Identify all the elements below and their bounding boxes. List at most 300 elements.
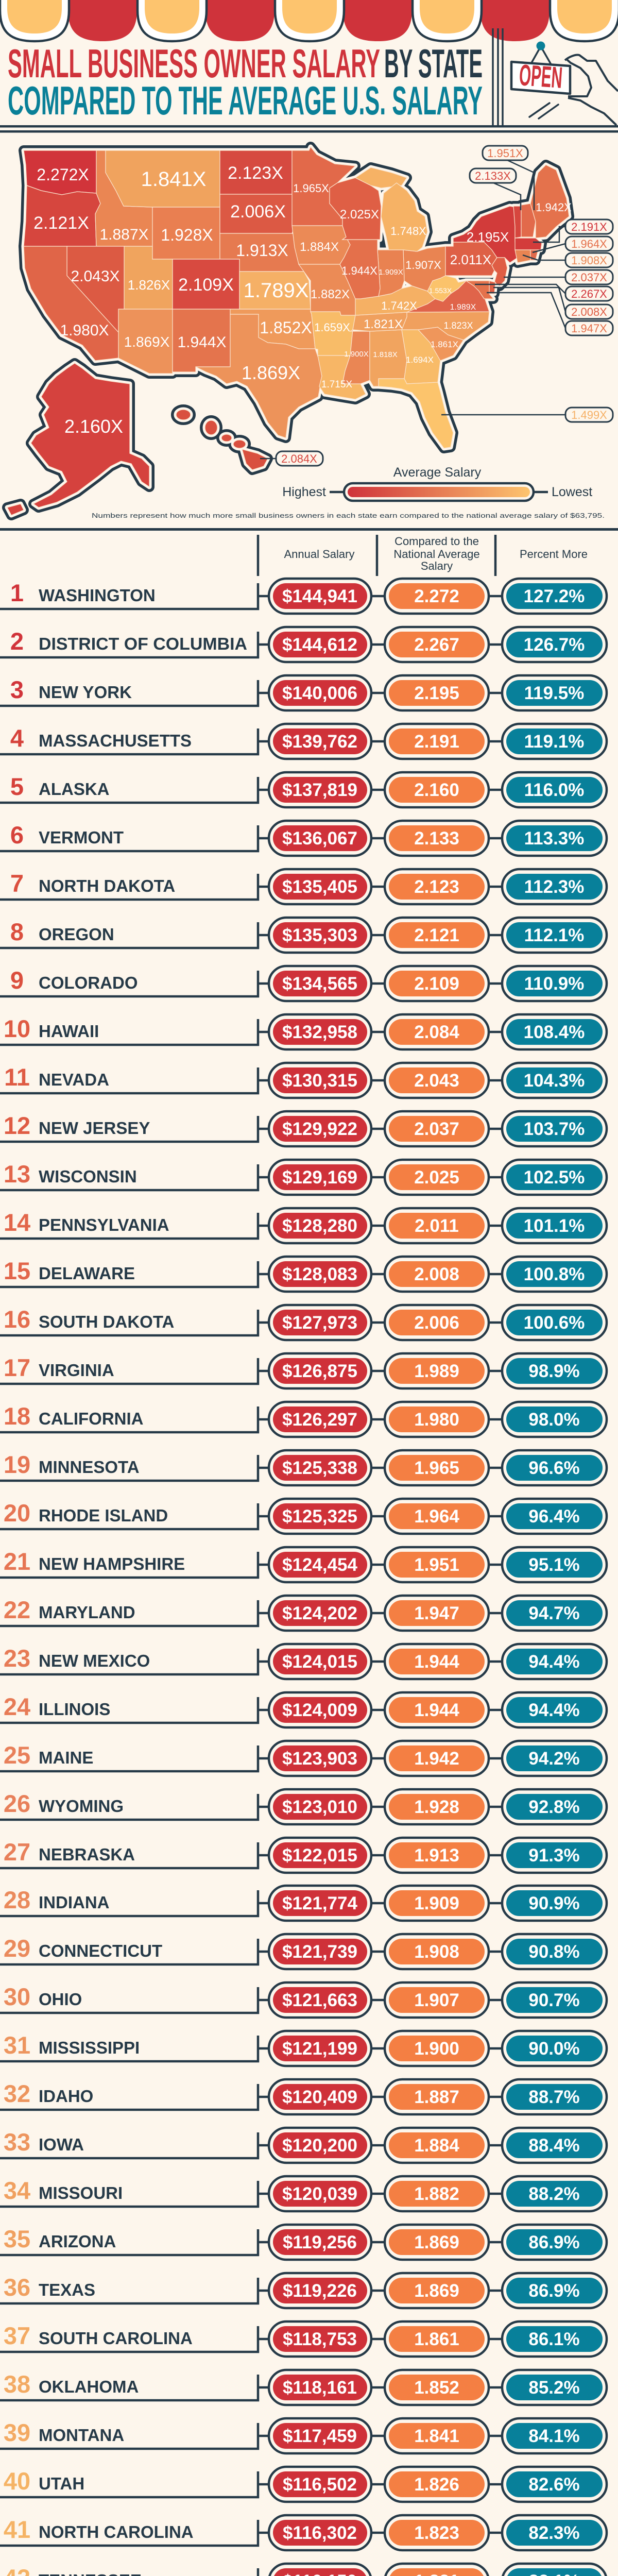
row 39: 39 bbox=[4, 2419, 30, 2446]
row 11: 11 bbox=[4, 1063, 30, 1091]
row 14 bbox=[0, 1208, 607, 1243]
map state labels: 1.789X bbox=[244, 279, 308, 302]
row 7: $135,405 bbox=[282, 877, 357, 897]
row 18: 98.0% bbox=[528, 1410, 580, 1430]
table header: Annual Salary bbox=[284, 548, 354, 561]
row 39: MONTANA bbox=[39, 2426, 124, 2445]
row 15: 2.008 bbox=[414, 1264, 459, 1284]
row 26: 1.928 bbox=[414, 1797, 459, 1817]
row 25: $123,903 bbox=[282, 1749, 357, 1769]
row 20: $125,325 bbox=[282, 1506, 357, 1527]
row 21: 21 bbox=[4, 1548, 30, 1575]
icon: open sign with hand: OPEN bbox=[518, 58, 563, 95]
row 3: 119.5% bbox=[524, 683, 584, 703]
row 27: NEBRASKA bbox=[39, 1845, 135, 1864]
map callouts: 2.133X bbox=[475, 170, 511, 182]
row 27: $122,015 bbox=[282, 1845, 357, 1866]
map bbox=[7, 146, 613, 515]
row 25 bbox=[0, 1741, 607, 1776]
row 7 bbox=[0, 869, 607, 904]
row 12: $129,922 bbox=[282, 1119, 357, 1139]
row 28: 90.9% bbox=[528, 1893, 580, 1913]
row 3: 3 bbox=[10, 676, 24, 703]
row 37: 86.1% bbox=[528, 2329, 580, 2349]
row 37: SOUTH CAROLINA bbox=[39, 2329, 193, 2348]
row 38: $118,161 bbox=[283, 2378, 357, 2398]
row 18: CALIFORNIA bbox=[39, 1409, 143, 1428]
row 3: $140,006 bbox=[282, 683, 357, 703]
row 1: $144,941 bbox=[282, 586, 357, 606]
row 10: HAWAII bbox=[39, 1022, 99, 1041]
row 36: 86.9% bbox=[528, 2281, 580, 2301]
row 13: 2.025 bbox=[414, 1167, 459, 1188]
row 13: $129,169 bbox=[282, 1167, 357, 1188]
row 5: ALASKA bbox=[39, 779, 109, 799]
row 16: SOUTH DAKOTA bbox=[39, 1312, 174, 1331]
row 41: 41 bbox=[4, 2516, 30, 2543]
row 29 bbox=[0, 1934, 607, 1969]
row 11: 104.3% bbox=[524, 1071, 585, 1091]
map state labels: 1.742X bbox=[381, 299, 417, 312]
map state labels: 1.826X bbox=[128, 277, 170, 293]
row 4 bbox=[0, 724, 607, 759]
map state labels: 1.694X bbox=[406, 355, 434, 365]
map state labels: 1.748X bbox=[390, 225, 426, 238]
map state labels: 1.900X bbox=[344, 350, 369, 359]
row 13: WISCONSIN bbox=[39, 1167, 137, 1186]
row 12: 12 bbox=[4, 1112, 30, 1139]
row 34: MISSOURI bbox=[39, 2183, 123, 2202]
row 30: 30 bbox=[4, 1983, 30, 2010]
row 1: WASHINGTON bbox=[39, 586, 156, 605]
row 34 bbox=[0, 2176, 607, 2211]
row 32: IDAHO bbox=[39, 2087, 93, 2106]
row 29: 29 bbox=[4, 1935, 30, 1962]
row 2: 126.7% bbox=[524, 635, 585, 655]
row 17 bbox=[0, 1353, 607, 1388]
row 18 bbox=[0, 1402, 607, 1437]
row 7: 7 bbox=[10, 870, 24, 897]
title bbox=[8, 41, 483, 123]
row 19: 19 bbox=[4, 1451, 30, 1478]
row 5: 116.0% bbox=[524, 780, 584, 800]
row 20: RHODE ISLAND bbox=[39, 1506, 168, 1525]
row 16: 100.6% bbox=[524, 1313, 585, 1333]
row 30: $121,663 bbox=[282, 1990, 357, 2010]
row 39: $117,459 bbox=[283, 2426, 357, 2446]
row 35 bbox=[0, 2225, 607, 2260]
row 26: 92.8% bbox=[528, 1797, 580, 1817]
row 41: 82.3% bbox=[528, 2523, 580, 2543]
row 16: 16 bbox=[4, 1306, 30, 1333]
row 26: WYOMING bbox=[39, 1797, 124, 1816]
row 21: 95.1% bbox=[528, 1555, 580, 1575]
map state labels: 1.965X bbox=[293, 182, 329, 195]
map state labels: 1.869X bbox=[124, 334, 170, 350]
row 2 bbox=[0, 627, 607, 662]
row 38: 85.2% bbox=[528, 2378, 580, 2398]
map state labels: 1.884X bbox=[300, 240, 339, 254]
row 20: 96.4% bbox=[528, 1506, 580, 1527]
row 33 bbox=[0, 2128, 607, 2163]
row 23: 23 bbox=[4, 1645, 30, 1672]
row 7: NORTH DAKOTA bbox=[39, 876, 175, 895]
map state labels: 1.818X bbox=[373, 350, 398, 359]
row 42 bbox=[0, 2564, 607, 2576]
row 28: 28 bbox=[4, 1886, 30, 1913]
row 16 bbox=[0, 1305, 607, 1340]
row 38: 38 bbox=[4, 2370, 30, 2398]
row 34: 1.882 bbox=[414, 2184, 459, 2204]
map state labels: 1.869X bbox=[242, 362, 300, 383]
map callouts: 1.908X bbox=[571, 254, 607, 267]
row 3: NEW YORK bbox=[39, 683, 132, 702]
map state labels: 2.025X bbox=[340, 208, 379, 222]
map state labels bbox=[33, 163, 572, 437]
row 18: 1.980 bbox=[414, 1410, 459, 1430]
row 38 bbox=[0, 2370, 607, 2405]
row 40: 40 bbox=[4, 2467, 30, 2495]
map callouts: 2.084X bbox=[281, 452, 317, 465]
row 12: NEW JERSEY bbox=[39, 1118, 150, 1138]
row 30: OHIO bbox=[39, 1990, 82, 2009]
row 6: 6 bbox=[10, 821, 24, 849]
row 31: MISSISSIPPI bbox=[39, 2038, 140, 2057]
row 22 bbox=[0, 1596, 607, 1631]
row 25: 94.2% bbox=[528, 1749, 580, 1769]
row 11: NEVADA bbox=[39, 1070, 109, 1089]
row 25: MAINE bbox=[39, 1748, 93, 1767]
row 11: $130,315 bbox=[282, 1071, 357, 1091]
map state labels: 1.944X bbox=[177, 334, 227, 351]
map callouts: 1.499X bbox=[571, 409, 607, 421]
row 17: 17 bbox=[4, 1354, 30, 1381]
map state labels: 2.195X bbox=[467, 229, 509, 245]
row 30 bbox=[0, 1982, 607, 2018]
row 32: $120,409 bbox=[282, 2087, 357, 2107]
row 29: 90.8% bbox=[528, 1942, 580, 1962]
row 14: PENNSYLVANIA bbox=[39, 1215, 169, 1234]
row 21: NEW HAMPSHIRE bbox=[39, 1554, 185, 1573]
row 22: 94.7% bbox=[528, 1603, 580, 1623]
row 2: DISTRICT OF COLUMBIA bbox=[39, 634, 247, 653]
awning bbox=[0, 0, 618, 41]
map state labels: 1.928X bbox=[161, 226, 213, 244]
row 21: $124,454 bbox=[282, 1555, 358, 1575]
row 37: $118,753 bbox=[283, 2329, 357, 2349]
row 1: 127.2% bbox=[524, 586, 585, 606]
row 3 bbox=[0, 675, 607, 710]
row 1: 1 bbox=[10, 579, 24, 606]
icon: open sign with hand bbox=[511, 41, 618, 125]
row 25: 1.942 bbox=[414, 1749, 459, 1769]
row 17: $126,875 bbox=[282, 1361, 357, 1381]
row 14: 101.1% bbox=[524, 1216, 585, 1236]
row 9: 110.9% bbox=[524, 974, 584, 994]
row 4: MASSACHUSETTS bbox=[39, 731, 192, 750]
row 36: 36 bbox=[4, 2274, 30, 2301]
row 14: $128,280 bbox=[282, 1216, 357, 1236]
row 19: 96.6% bbox=[528, 1458, 580, 1478]
map state labels: 2.006X bbox=[230, 202, 286, 222]
row 27: 27 bbox=[4, 1838, 30, 1866]
row 13: 102.5% bbox=[524, 1167, 585, 1188]
row 8: 112.1% bbox=[524, 925, 584, 945]
row 32 bbox=[0, 2079, 607, 2114]
row 33: IOWA bbox=[39, 2135, 84, 2154]
map state labels: 1.882X bbox=[311, 287, 350, 301]
map state labels: 1.944X bbox=[341, 264, 377, 277]
map state labels: 2.272X bbox=[37, 165, 89, 184]
legend: average salary bbox=[282, 465, 592, 501]
row 1 bbox=[0, 579, 607, 614]
table header: Salary bbox=[421, 560, 453, 572]
row 13: 13 bbox=[4, 1160, 30, 1188]
row 34: 34 bbox=[4, 2177, 30, 2204]
row 30: 90.7% bbox=[528, 1990, 580, 2010]
row 34: 88.2% bbox=[528, 2184, 580, 2204]
row 6: 2.133 bbox=[414, 828, 459, 849]
row 15: $128,083 bbox=[282, 1264, 357, 1284]
door frame lines bbox=[493, 28, 503, 126]
map state labels: 1.821X bbox=[364, 317, 403, 331]
row 5: 2.160 bbox=[414, 780, 459, 800]
map state labels: 1.841X bbox=[141, 168, 206, 191]
map callouts: 1.964X bbox=[571, 238, 607, 250]
row 24: 1.944 bbox=[414, 1700, 459, 1720]
row 41: $116,302 bbox=[283, 2523, 357, 2543]
map state labels: 1.980X bbox=[60, 322, 109, 339]
row 4: 2.191 bbox=[414, 732, 459, 752]
row 5: 5 bbox=[10, 773, 24, 800]
row 7: 112.3% bbox=[524, 877, 584, 897]
row 41 bbox=[0, 2515, 607, 2550]
row 13 bbox=[0, 1160, 607, 1195]
row 36 bbox=[0, 2273, 607, 2308]
row 24: $124,009 bbox=[282, 1700, 357, 1720]
row 36: $119,226 bbox=[283, 2281, 357, 2301]
row 31: 90.0% bbox=[528, 2039, 580, 2059]
row 2: 2.267 bbox=[414, 635, 459, 655]
row 17: 98.9% bbox=[528, 1361, 580, 1381]
map state labels: 1.823X bbox=[443, 320, 473, 331]
row 36: 1.869 bbox=[414, 2281, 459, 2301]
row 33: 88.4% bbox=[528, 2136, 580, 2156]
map state labels: 2.011X bbox=[450, 252, 491, 267]
map state labels: 1.715X bbox=[321, 379, 352, 390]
map callouts: 2.267X bbox=[571, 287, 607, 300]
legend: average salary: Lowest bbox=[552, 485, 592, 499]
row 37 bbox=[0, 2321, 607, 2357]
row 17: VIRGINIA bbox=[39, 1361, 114, 1380]
map state labels: 2.043X bbox=[71, 268, 120, 285]
row 9 bbox=[0, 966, 607, 1001]
row 40: 82.6% bbox=[528, 2475, 580, 2495]
row 40 bbox=[0, 2467, 607, 2502]
row 28: $121,774 bbox=[282, 1893, 358, 1913]
row 19 bbox=[0, 1450, 607, 1485]
row 12 bbox=[0, 1111, 607, 1146]
row 11 bbox=[0, 1063, 607, 1098]
row 4: 4 bbox=[10, 724, 24, 752]
row 35: 86.9% bbox=[528, 2232, 580, 2252]
row 27: 1.913 bbox=[414, 1845, 459, 1866]
row 22: $124,202 bbox=[282, 1603, 357, 1623]
row 40: $116,502 bbox=[283, 2475, 357, 2495]
row 12: 2.037 bbox=[414, 1119, 459, 1139]
row 29: CONNECTICUT bbox=[39, 1941, 162, 1960]
row 26 bbox=[0, 1789, 607, 1824]
row 37: 1.861 bbox=[414, 2329, 459, 2349]
map state labels: 1.907X bbox=[405, 259, 441, 272]
map state labels: 1.659X bbox=[314, 321, 350, 334]
row 23 bbox=[0, 1644, 607, 1679]
row 9: 9 bbox=[10, 967, 24, 994]
row 35: ARIZONA bbox=[39, 2232, 116, 2251]
row 7: 2.123 bbox=[414, 877, 459, 897]
row 32: 32 bbox=[4, 2080, 30, 2107]
row 10: 10 bbox=[4, 1015, 30, 1042]
row 5: $137,819 bbox=[282, 780, 357, 800]
row 10: 2.084 bbox=[414, 1022, 459, 1042]
row 30: 1.907 bbox=[414, 1990, 459, 2010]
map state labels: 1.861X bbox=[431, 340, 458, 349]
row 28: 1.909 bbox=[414, 1893, 459, 1913]
map state labels: 1.553X bbox=[429, 286, 452, 295]
row 4: $139,762 bbox=[282, 732, 357, 752]
legend: average salary: Highest bbox=[282, 485, 326, 499]
map state labels: 1.852X bbox=[260, 318, 312, 337]
row 31: $121,199 bbox=[282, 2039, 357, 2059]
row 19: MINNESOTA bbox=[39, 1458, 140, 1477]
map callouts: 2.191X bbox=[571, 221, 607, 233]
map state labels: 2.123X bbox=[228, 163, 283, 183]
row 23: 94.4% bbox=[528, 1652, 580, 1672]
legend: average salary: Average Salary bbox=[393, 465, 482, 480]
row 10: $132,958 bbox=[282, 1022, 357, 1042]
row 2: 2 bbox=[10, 628, 24, 655]
row 6: $136,067 bbox=[282, 828, 357, 849]
row 31 bbox=[0, 2031, 607, 2066]
title: BY STATE bbox=[384, 41, 483, 86]
row 39: 84.1% bbox=[528, 2426, 580, 2446]
row 23: NEW MEXICO bbox=[39, 1651, 150, 1670]
row 8: OREGON bbox=[39, 925, 114, 944]
row 40: 1.826 bbox=[414, 2475, 459, 2495]
row 2: $144,612 bbox=[282, 635, 357, 655]
map callouts: 1.951X bbox=[487, 147, 523, 160]
row 14: 14 bbox=[4, 1209, 30, 1236]
row 24 bbox=[0, 1692, 607, 1727]
row 15 bbox=[0, 1257, 607, 1292]
row 34: $120,039 bbox=[282, 2184, 357, 2204]
map state labels: 2.160X bbox=[64, 416, 123, 437]
row 24: 24 bbox=[4, 1693, 30, 1720]
row 16: $127,973 bbox=[282, 1313, 357, 1333]
row 22: 1.947 bbox=[414, 1603, 459, 1623]
row 10 bbox=[0, 1014, 607, 1049]
map state labels: 1.942X bbox=[536, 201, 572, 214]
table rows bbox=[0, 579, 607, 2576]
map state labels: 1.887X bbox=[99, 226, 149, 243]
row 8: 2.121 bbox=[414, 925, 459, 945]
row 1: 2.272 bbox=[414, 586, 459, 606]
row 19: $125,338 bbox=[282, 1458, 357, 1478]
row 33: 33 bbox=[4, 2128, 30, 2156]
row 17: 1.989 bbox=[414, 1361, 459, 1381]
row 12: 103.7% bbox=[524, 1119, 585, 1139]
row 35: $119,256 bbox=[283, 2232, 357, 2252]
row 3: 2.195 bbox=[414, 683, 459, 703]
row 22: MARYLAND bbox=[39, 1603, 135, 1622]
row 41: NORTH CAROLINA bbox=[39, 2522, 194, 2541]
row 15: 100.8% bbox=[524, 1264, 585, 1284]
row 8: 8 bbox=[10, 918, 24, 945]
row 9: $134,565 bbox=[282, 974, 357, 994]
row 38: 1.852 bbox=[414, 2378, 459, 2398]
row 15: 15 bbox=[4, 1257, 30, 1284]
row 37: 37 bbox=[4, 2322, 30, 2349]
row 36: TEXAS bbox=[39, 2280, 95, 2299]
row 28: INDIANA bbox=[39, 1893, 109, 1912]
row 29: $121,739 bbox=[282, 1942, 357, 1962]
row 20: 20 bbox=[4, 1499, 30, 1527]
map callouts: 2.008X bbox=[571, 306, 607, 318]
row 39: 1.841 bbox=[414, 2426, 459, 2446]
map note: Numbers represent how much more small business owners in each state earn compared to the national average salary of $63,795. bbox=[92, 512, 605, 519]
map callouts: 2.037X bbox=[571, 271, 607, 284]
table header bbox=[258, 535, 588, 576]
row 26: $123,010 bbox=[282, 1797, 357, 1817]
row 11: 2.043 bbox=[414, 1071, 459, 1091]
map state labels: 1.909X bbox=[379, 268, 403, 277]
row 15: DELAWARE bbox=[39, 1264, 135, 1283]
row 9: COLORADO bbox=[39, 973, 138, 992]
row 6: VERMONT bbox=[39, 828, 124, 847]
row 20 bbox=[0, 1499, 607, 1534]
row 41: 1.823 bbox=[414, 2523, 459, 2543]
row 40: UTAH bbox=[39, 2474, 84, 2493]
row 23: $124,015 bbox=[282, 1652, 357, 1672]
row 38: OKLAHOMA bbox=[39, 2377, 139, 2396]
row 8: $135,303 bbox=[282, 925, 357, 945]
table header: Compared to the bbox=[394, 535, 479, 548]
row 26: 26 bbox=[4, 1790, 30, 1817]
row 10: 108.4% bbox=[524, 1022, 585, 1042]
row 6: 113.3% bbox=[524, 828, 584, 849]
row 23: 1.944 bbox=[414, 1652, 459, 1672]
row 16: 2.006 bbox=[414, 1313, 459, 1333]
map state labels: 2.109X bbox=[178, 275, 234, 295]
row 19: 1.965 bbox=[414, 1458, 459, 1478]
row 24: ILLINOIS bbox=[39, 1700, 110, 1719]
row 18: 18 bbox=[4, 1402, 30, 1430]
row 35: 35 bbox=[4, 2225, 30, 2252]
row 39 bbox=[0, 2418, 607, 2453]
row 31: 31 bbox=[4, 2031, 30, 2059]
row 24: 94.4% bbox=[528, 1700, 580, 1720]
row 22: 22 bbox=[4, 1596, 30, 1623]
table header: National Average bbox=[393, 548, 480, 561]
row 5 bbox=[0, 772, 607, 807]
row 32: 1.887 bbox=[414, 2087, 459, 2107]
row 21: 1.951 bbox=[414, 1555, 459, 1575]
row 25: 25 bbox=[4, 1741, 30, 1769]
row 27 bbox=[0, 1838, 607, 1873]
map state labels: 2.121X bbox=[33, 213, 89, 233]
row 35: 1.869 bbox=[414, 2232, 459, 2252]
map callouts: 1.947X bbox=[571, 322, 607, 335]
